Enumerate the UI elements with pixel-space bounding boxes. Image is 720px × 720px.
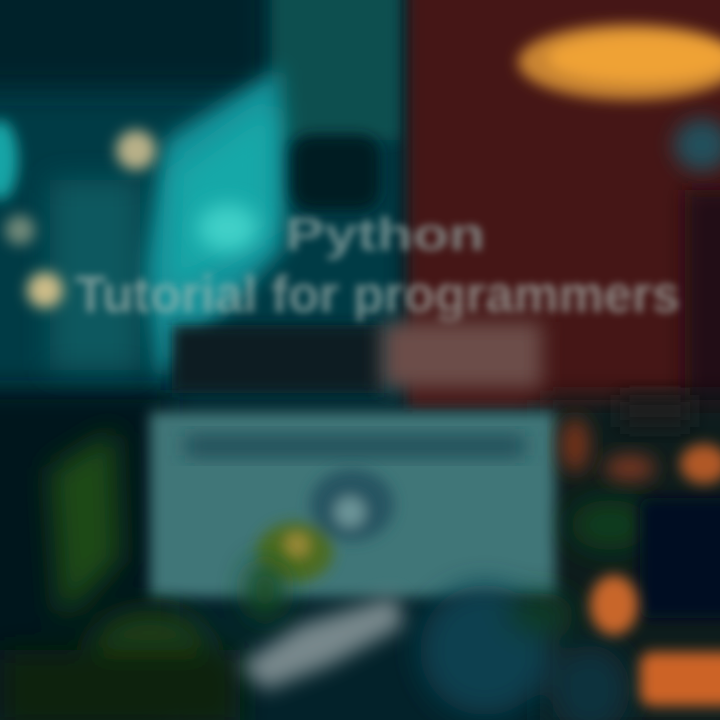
blurred title [75, 208, 680, 324]
cyan glowing panel [50, 68, 282, 380]
screen panel [150, 412, 555, 597]
laptop band [172, 322, 542, 393]
ceiling lamp [518, 24, 720, 100]
dark head shape [292, 135, 380, 210]
blue blob [420, 585, 630, 720]
screen heading line [185, 436, 525, 456]
white swoosh [240, 595, 405, 690]
string lights [5, 130, 156, 308]
plants [0, 430, 650, 720]
python logo [257, 469, 394, 582]
blurred title: Python [285, 208, 485, 260]
dark right block [640, 498, 720, 618]
orange lights [561, 395, 720, 706]
left glow [0, 120, 18, 200]
lamp small blue shade [674, 119, 720, 171]
blurred title: Tutorial for programmers [75, 266, 680, 324]
